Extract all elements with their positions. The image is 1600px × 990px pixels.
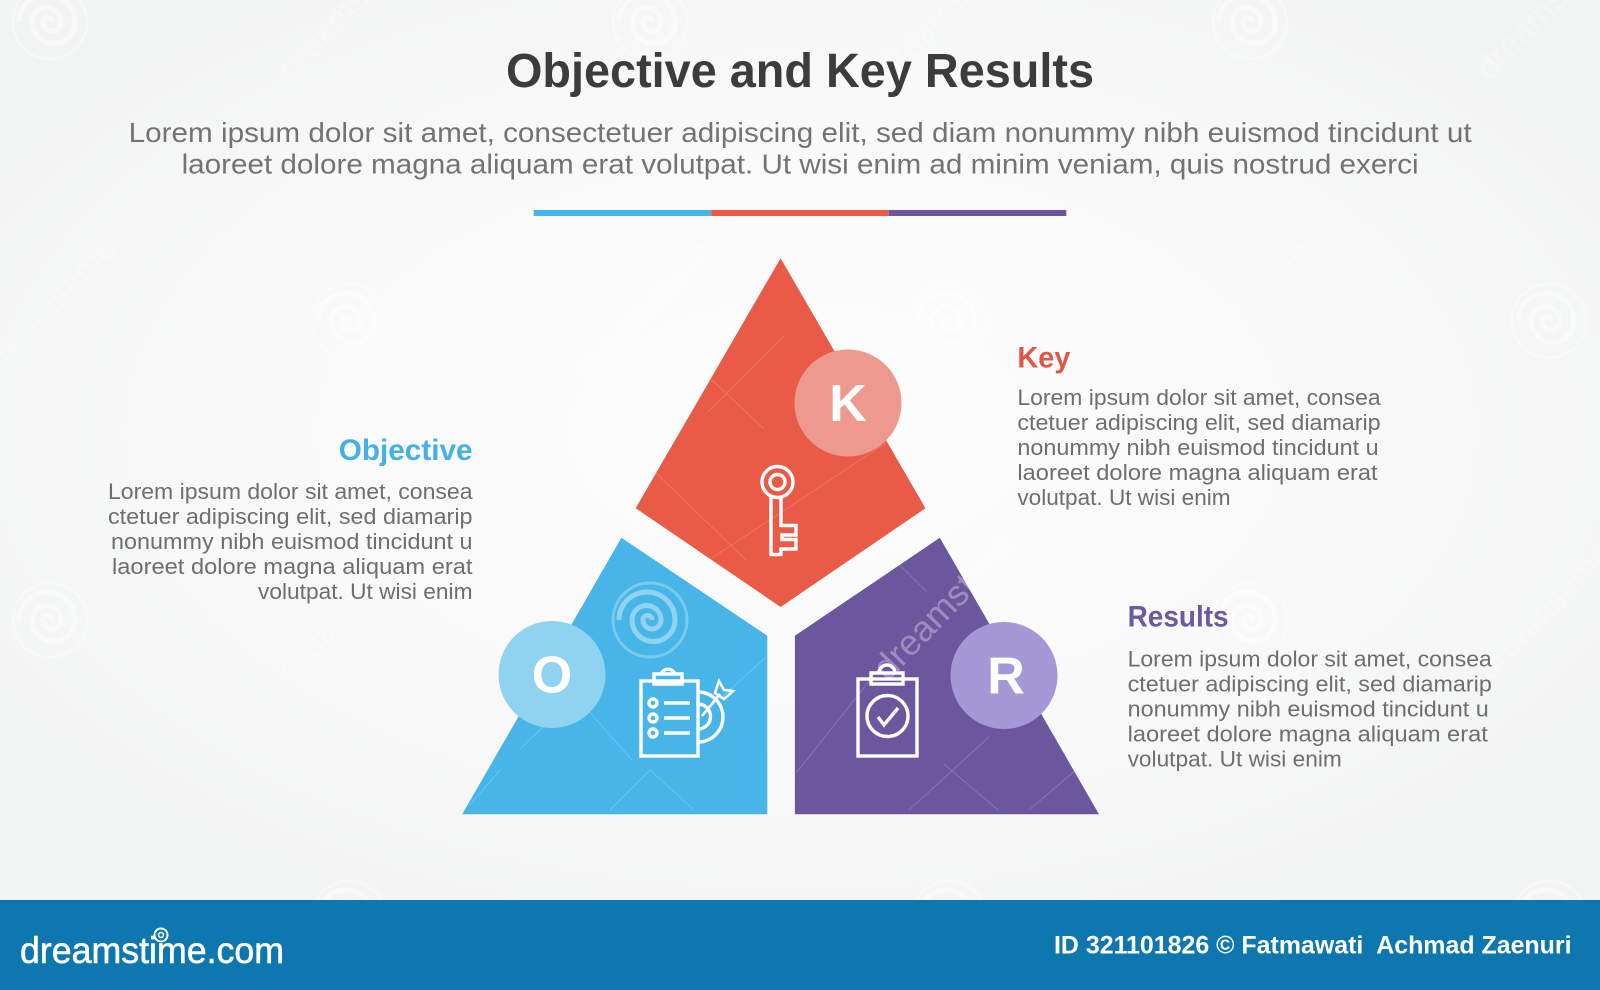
subtitle [129, 117, 1472, 180]
text block: objective: volutpat. Ut wisi enim [258, 579, 472, 604]
text block: key: ctetuer adipiscing elit, sed diamarip [1017, 410, 1381, 435]
circle badge R [950, 622, 1058, 729]
text block: key: Key [1017, 342, 1071, 374]
icon: clipboard with check [858, 665, 917, 756]
panel: key segment [636, 258, 926, 607]
circle badge K: K [829, 375, 867, 433]
circle badge O [498, 621, 606, 728]
circle badge R: R [987, 648, 1025, 706]
panel: objective segment [462, 538, 767, 814]
text block: results: volutpat. Ut wisi enim [1128, 746, 1342, 772]
text block: results: Results [1128, 601, 1229, 634]
watermark pattern: dreamstime [270, 533, 421, 688]
footer bar [0, 900, 1600, 990]
panel: results segment [795, 524, 1099, 814]
watermark pattern: dreamstime [568, 233, 719, 388]
footer logo: dreamstime.com [20, 930, 284, 971]
text block: key: laoreet dolore magna aliquam erat [1017, 460, 1378, 485]
text block: results: Lorem ipsum dolor sit amet, consea [1128, 646, 1493, 672]
title: Objective and Key Results [506, 45, 1094, 98]
text block: objective: laoreet dolore magna aliquam erat [112, 554, 472, 579]
icon: clipboard with target [641, 669, 733, 756]
watermark text on results: dreamstime [864, 524, 1024, 688]
text block: objective [108, 434, 473, 604]
text block: key: volutpat. Ut wisi enim [1017, 485, 1231, 510]
tricolor divider [534, 210, 1066, 216]
circle badge K [794, 350, 902, 456]
text block: key: Lorem ipsum dolor sit amet, consea [1017, 385, 1381, 410]
subtitle: Lorem ipsum dolor sit amet, consectetuer adipiscing elit, sed diam nonummy nibh euismod tincidunt ut [129, 117, 1472, 148]
text block: objective: Lorem ipsum dolor sit amet, consea [108, 479, 473, 504]
text block: key: nonummy nibh euismod tincidunt u [1017, 435, 1379, 460]
text block: results: laoreet dolore magna aliquam erat [1128, 722, 1488, 746]
icon: key [762, 466, 796, 554]
circle badge O: O [532, 646, 572, 704]
text block: objective: ctetuer adipiscing elit, sed diamarip [108, 504, 473, 529]
text block: results [1128, 601, 1493, 772]
subtitle: laoreet dolore magna aliquam erat volutpat. Ut wisi enim ad minim veniam, quis nostrud exerci [182, 148, 1419, 180]
text block: key [1017, 342, 1381, 510]
text block: objective: nonummy nibh euismod tincidunt u [111, 529, 472, 554]
text block: results: ctetuer adipiscing elit, sed diamarip [1128, 672, 1492, 696]
text block: objective: Objective [339, 434, 472, 467]
text block: results: nonummy nibh euismod tincidunt u [1128, 696, 1489, 722]
watermark spiral on objective [613, 583, 687, 657]
watermark pattern: dreamstime [1168, 233, 1319, 388]
footer credit: ID 321101826 © Fatmawati Achmad Zaenuri [1054, 932, 1572, 960]
